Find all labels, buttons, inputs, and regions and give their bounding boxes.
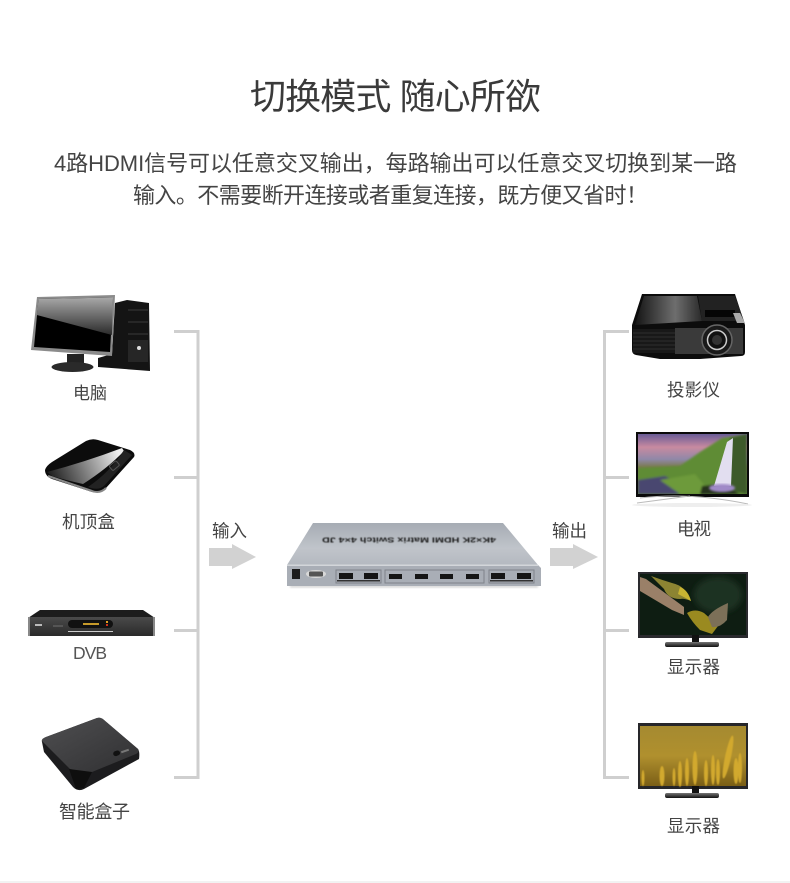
input label: 输入 [212,521,247,541]
icon: computer [31,295,150,372]
icon: monitor with birds [638,572,748,647]
icon: projector [632,294,745,359]
icon: smart box [42,718,139,790]
arrow: input [209,544,256,569]
left input bracket [174,332,198,778]
label: monitor: 显示器 [667,657,720,677]
product text on the switch: 4K×2K HDMI Matrix Switch 4×4 JD [321,536,496,544]
description text [54,151,737,208]
title: 切换模式 随心所欲 [250,76,541,117]
icon: DVB receiver [28,610,155,636]
description text: 4路HDMI信号可以任意交叉输出，每路输出可以任意交叉切换到某一路 [54,151,737,176]
label: smart box: 智能盒子 [59,802,130,822]
icon: TV with waterfall [632,432,752,507]
description text: 输入。不需要断开连接或者重复连接，既方便又省时！ [133,183,648,208]
label: set-top box: 机顶盒 [62,512,116,532]
icon: monitor with wheat [638,723,748,798]
label: computer: 电脑 [73,384,107,403]
right output bracket [604,332,629,778]
output label: 输出 [552,521,587,541]
icon: set-top box [45,439,134,492]
arrow: output [550,544,598,569]
label: monitor 2: 显示器 [667,816,720,836]
label: TV: 电视 [677,519,711,539]
HDMI matrix switch [287,523,541,588]
label: projector: 投影仪 [667,380,720,400]
label: DVB: DVB [73,643,107,663]
